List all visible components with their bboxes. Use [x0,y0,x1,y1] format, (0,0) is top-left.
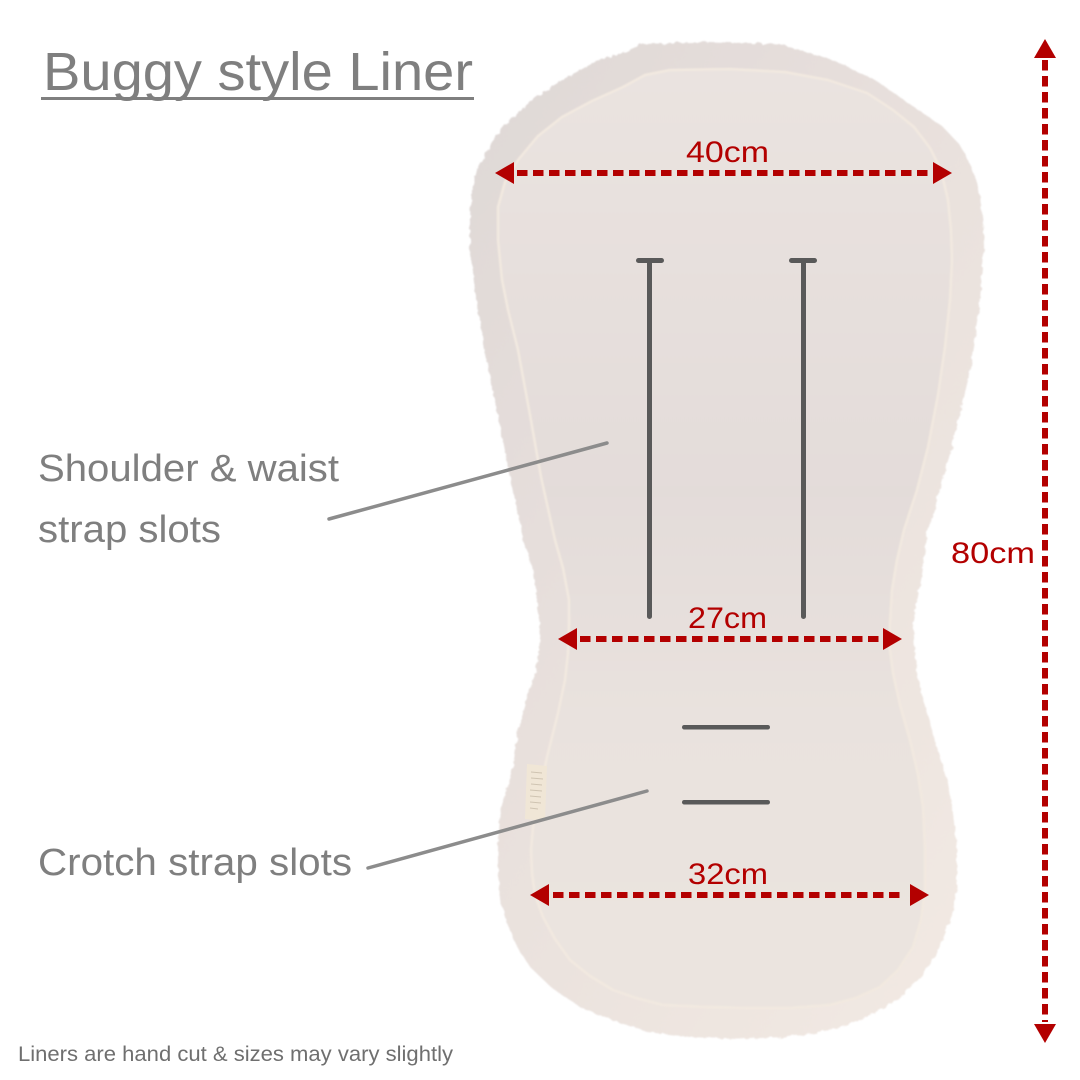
label: shoulder and waist strap slots: strap slots [38,509,221,551]
measure: 40cm width [495,136,952,184]
label: shoulder and waist strap slots [38,443,607,551]
measure: 40cm width: 40cm [686,136,769,169]
footnote: Liners are hand cut & sizes may vary slightly [18,1043,454,1066]
label: crotch strap slots: Crotch strap slots [38,842,352,884]
measure: 32cm width: 32cm [688,858,768,891]
liner: sheepskin [470,42,984,1039]
measure: 32cm width [530,858,929,906]
crotch strap slots [682,725,770,804]
fur edge [470,42,984,1039]
title: Buggy style Liner [43,42,473,102]
shoulder strap slots [636,258,817,619]
label: shoulder and waist strap slots: Shoulder & waist [38,448,339,490]
measure: 27cm width [558,602,902,650]
measure: 80cm height [951,39,1056,1043]
suede face with binding [498,69,952,1008]
label: crotch strap slots [38,791,647,884]
care label [525,764,547,821]
measure: 80cm height: 80cm [951,537,1035,570]
measure: 27cm width: 27cm [688,602,767,635]
